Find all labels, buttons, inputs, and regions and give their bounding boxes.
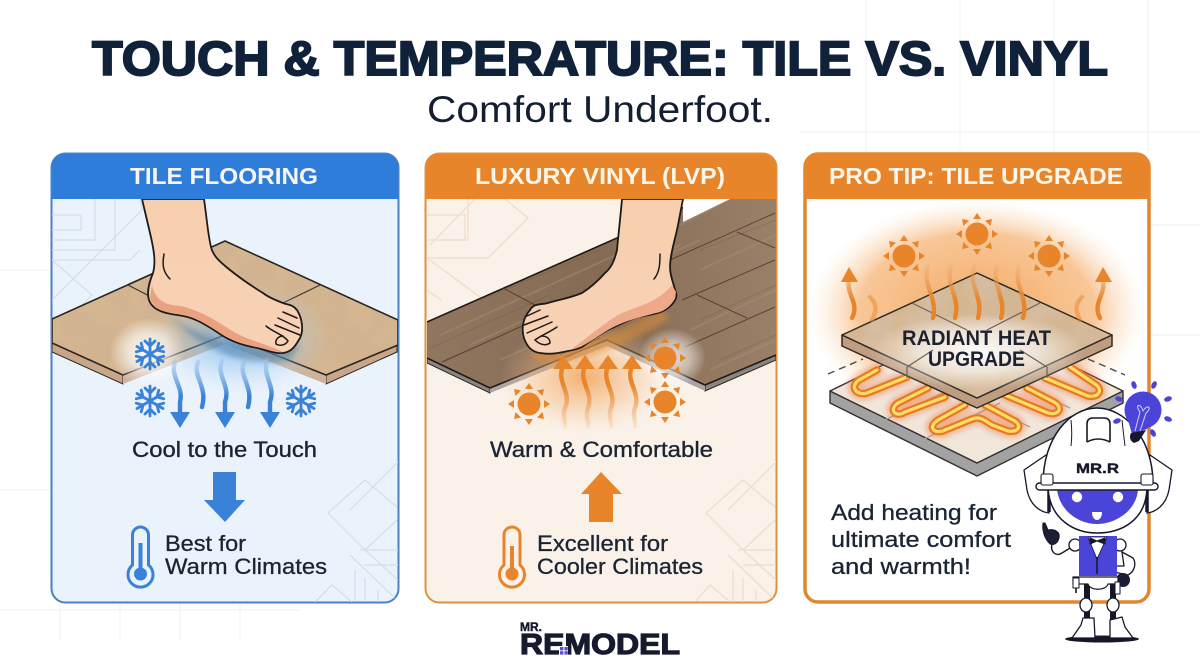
text: add heating: and warmth!: [831, 554, 971, 579]
arms: [1043, 523, 1135, 587]
text: excellent for cooler climates: Cooler Climates: [537, 554, 703, 579]
icon: foot on tile: [142, 199, 302, 353]
legs and boots: [1072, 583, 1133, 638]
panel body: [52, 154, 398, 602]
icon: suns: [508, 337, 686, 425]
helmet: [1036, 408, 1158, 490]
panel: pro tip: [804, 154, 1150, 602]
vest and bow tie: [1079, 536, 1117, 576]
panel header: [426, 154, 776, 199]
helmet label: MR.R: [1076, 460, 1119, 476]
shadow: [1065, 636, 1139, 642]
logo: Mr. Remodel: REMODEL: [520, 629, 680, 661]
text: best for warm climates: Warm Climates: [165, 554, 327, 579]
label: radiant heat upgrade: RADIANT HEAT: [902, 327, 1051, 350]
icon: snowflakes: [135, 339, 316, 416]
panel: luxury vinyl: [426, 154, 776, 602]
heading: luxury vinyl: LUXURY VINYL (LVP): [475, 163, 725, 189]
cold waves and arrows: [174, 360, 272, 414]
arrow: up: [581, 472, 622, 522]
heat arrows: [841, 267, 1112, 282]
panel header: [804, 154, 1150, 199]
heading: tile flooring: TILE FLOORING: [130, 163, 318, 189]
logo: Mr. Remodel: MR.: [520, 620, 542, 634]
text: best for warm climates: Best for: [165, 531, 246, 556]
icon: radiant suns: [883, 213, 1070, 277]
tile floor: [52, 241, 398, 384]
panel: tile flooring: [52, 154, 398, 602]
robot mascot MR.R: [1024, 380, 1173, 642]
heat glow: [816, 205, 1138, 379]
tool belt: [1073, 577, 1120, 594]
label: warm and comfortable: Warm & Comfortable: [490, 437, 713, 462]
text: excellent for cooler climates: [537, 531, 703, 579]
subtitle: Comfort Underfoot.: [427, 89, 773, 130]
heat waves: [849, 267, 1103, 320]
lower slab with heating coils: [828, 319, 1125, 476]
label: cool to the touch: Cool to the Touch: [132, 437, 317, 462]
warm glow: [500, 310, 706, 434]
label: radiant heat upgrade: [902, 327, 1051, 371]
vinyl plank floor: [427, 199, 776, 393]
title: TOUCH & TEMPERATURE: TILE VS. VINYL: [92, 33, 1108, 86]
icon: foot on vinyl: [523, 199, 683, 354]
warm waves and arrows: [561, 366, 636, 426]
text: best for warm climates: [165, 531, 327, 579]
ear muffs: [1024, 455, 1172, 513]
text: excellent for cooler climates: Excellent for: [537, 531, 668, 556]
head and visor: [1048, 488, 1147, 533]
text: add heating: [831, 500, 1011, 579]
icon: light bulb: [1112, 380, 1173, 443]
text: add heating: ultimate comfort: [831, 527, 1011, 552]
label: radiant heat upgrade: UPGRADE: [928, 348, 1025, 371]
upper tile: [842, 273, 1112, 408]
panel body: [805, 154, 1149, 602]
panel body: [426, 154, 776, 602]
cold glow: [110, 282, 330, 394]
heading: pro tip: PRO TIP: TILE UPGRADE: [829, 163, 1123, 189]
panel header: [52, 154, 398, 199]
icon: warm thermometer: [500, 527, 524, 587]
icon: cold thermometer: [128, 527, 153, 587]
arrow: down: [204, 472, 245, 522]
text: add heating: Add heating for: [831, 500, 997, 525]
